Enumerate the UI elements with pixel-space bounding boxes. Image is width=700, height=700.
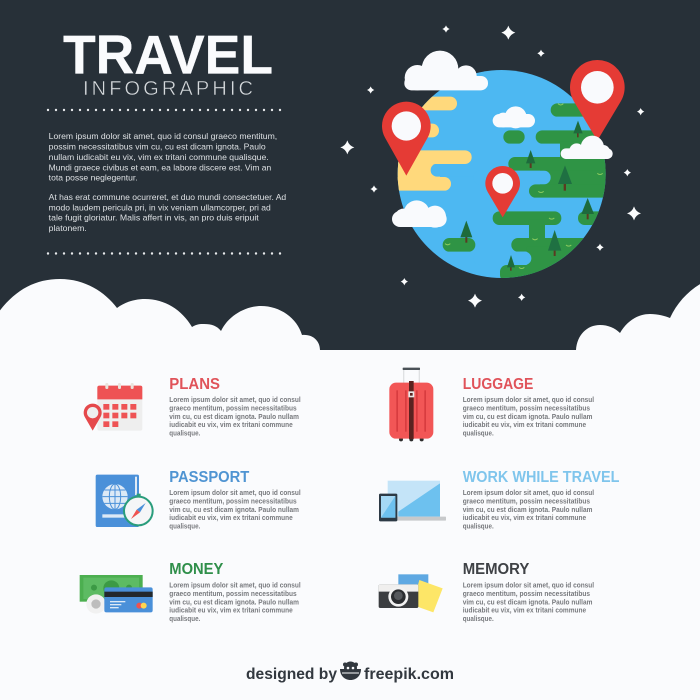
intro text block: platonem. bbox=[49, 224, 87, 233]
cloud: right bbox=[561, 136, 613, 159]
heading: work while travel: WORK WHILE TRAVEL bbox=[463, 469, 619, 486]
heading: luggage: LUGGAGE bbox=[463, 376, 533, 393]
text block: luggage: graeco mentitum, possim necessitatibus bbox=[463, 404, 590, 412]
text block: passport bbox=[169, 489, 301, 531]
icon: passport with compass bbox=[96, 475, 153, 527]
text block: work while travel: iudicabit eu vix, vim ex tritani commune bbox=[463, 514, 586, 522]
intro text block: nullam iudicabit eu vix, vim ex tritani commune qualisque. bbox=[49, 153, 269, 162]
intro text block: Lorem ipsum dolor sit amet, quo id consul graeco mentitum, bbox=[49, 132, 277, 141]
icon: calendar with pin bbox=[84, 383, 142, 431]
text block: work while travel: qualisque. bbox=[463, 523, 494, 531]
panel: plans bbox=[84, 376, 301, 438]
icon: banknote, coin and card bbox=[80, 575, 153, 614]
text block: money: Lorem ipsum dolor sit amet, quo id consul bbox=[169, 582, 301, 590]
icon: camera and photos bbox=[379, 574, 443, 612]
panel: work while travel bbox=[379, 469, 619, 531]
cloud: lower left bbox=[392, 200, 447, 228]
text block: work while travel: Lorem ipsum dolor sit amet, quo id consul bbox=[463, 489, 594, 497]
text block: luggage bbox=[463, 396, 594, 438]
white cloud footer background bbox=[0, 279, 700, 700]
text block: work while travel bbox=[463, 489, 594, 531]
text block: work while travel: vim cu, cu est dicam ignota. Paulo nullam bbox=[463, 506, 592, 514]
text block: money: qualisque. bbox=[169, 615, 200, 623]
icon: laptop and tablet bbox=[379, 481, 446, 521]
text block: passport: iudicabit eu vix, vim ex tritani commune bbox=[169, 514, 293, 522]
text block: money: graeco mentitum, possim necessitatibus bbox=[169, 590, 297, 598]
heading: passport: PASSPORT bbox=[169, 469, 250, 486]
intro text block bbox=[49, 132, 287, 233]
subtitle: INFOGRAPHIC bbox=[83, 78, 253, 100]
footer credit bbox=[246, 662, 454, 683]
panel: money bbox=[80, 561, 301, 623]
dark header background bbox=[0, 0, 700, 351]
text block: passport: graeco mentitum, possim necessitatibus bbox=[169, 497, 297, 505]
text block: money: vim cu, cu est dicam ignota. Paulo nullam bbox=[169, 598, 299, 606]
text block: luggage: qualisque. bbox=[463, 430, 494, 438]
map pin: left bbox=[382, 102, 431, 176]
heading: money: MONEY bbox=[169, 561, 224, 578]
icon: suitcase bbox=[389, 368, 433, 441]
heading: memory: MEMORY bbox=[463, 561, 530, 578]
text block: work while travel: graeco mentitum, possim necessitatibus bbox=[463, 497, 590, 505]
icon: freepik logo bbox=[340, 662, 361, 680]
text block: plans bbox=[169, 396, 301, 438]
cloud: top bbox=[404, 51, 488, 90]
text block: luggage: vim cu, cu est dicam ignota. Paulo nullam bbox=[463, 413, 592, 421]
text block: plans: graeco mentitum, possim necessitatibus bbox=[169, 404, 297, 412]
text block: memory: graeco mentitum, possim necessitatibus bbox=[463, 590, 590, 598]
title: TRAVEL bbox=[63, 24, 273, 86]
text block: money: iudicabit eu vix, vim ex tritani commune bbox=[169, 607, 293, 615]
text block: plans: qualisque. bbox=[169, 430, 200, 438]
text block: memory: Lorem ipsum dolor sit amet, quo id consul bbox=[463, 582, 594, 590]
trees bbox=[460, 121, 594, 271]
map pin: centre bbox=[485, 166, 520, 217]
cloud: centre bbox=[493, 106, 535, 128]
panel: passport bbox=[96, 469, 301, 531]
intro text block: modo laudem pericula pri, in vix veniam ullamcorper, pri ad bbox=[49, 204, 271, 212]
text block: memory: iudicabit eu vix, vim ex tritani commune bbox=[463, 607, 586, 615]
panel: memory bbox=[379, 561, 594, 623]
footer credit: designed by bbox=[246, 666, 337, 683]
text block: luggage: Lorem ipsum dolor sit amet, quo id consul bbox=[463, 396, 594, 404]
intro text block: tota posse neglegentur. bbox=[49, 174, 138, 182]
text block: passport: qualisque. bbox=[169, 523, 200, 531]
stars bbox=[340, 25, 644, 308]
text block: memory bbox=[463, 582, 594, 623]
globe illustration bbox=[340, 25, 644, 308]
heading: plans: PLANS bbox=[169, 376, 220, 393]
globe with continents bbox=[398, 70, 606, 278]
text block: passport: vim cu, cu est dicam ignota. Paulo nullam bbox=[169, 506, 299, 514]
intro text block: Mundi graece civibus et eam, ea labore discere est. Vim an bbox=[49, 163, 272, 172]
text block: passport: Lorem ipsum dolor sit amet, quo id consul bbox=[169, 489, 301, 497]
text block: memory: qualisque. bbox=[463, 615, 494, 623]
text block: memory: vim cu, cu est dicam ignota. Paulo nullam bbox=[463, 598, 592, 606]
intro text block: possim necessitatibus vim cu, cu est dicam ignota. Paulo bbox=[49, 143, 266, 152]
grass marks bbox=[445, 104, 603, 268]
footer credit: freepik.com bbox=[364, 666, 454, 683]
map pin: right bbox=[570, 60, 625, 141]
text block: plans: vim cu, cu est dicam ignota. Paulo nullam bbox=[169, 413, 299, 421]
text block: plans: iudicabit eu vix, vim ex tritani commune bbox=[169, 421, 293, 429]
text block: money bbox=[169, 582, 301, 623]
intro text block: tale fugit gloriatur. Malis affert in vis, an pro duis eripuit bbox=[49, 214, 259, 223]
panel: luggage bbox=[389, 368, 594, 441]
intro text block: At has erat commune ocurreret, et duo mundi consectetuer. Ad bbox=[49, 193, 287, 202]
text block: plans: Lorem ipsum dolor sit amet, quo id consul bbox=[169, 396, 301, 404]
text block: luggage: iudicabit eu vix, vim ex tritani commune bbox=[463, 421, 586, 429]
